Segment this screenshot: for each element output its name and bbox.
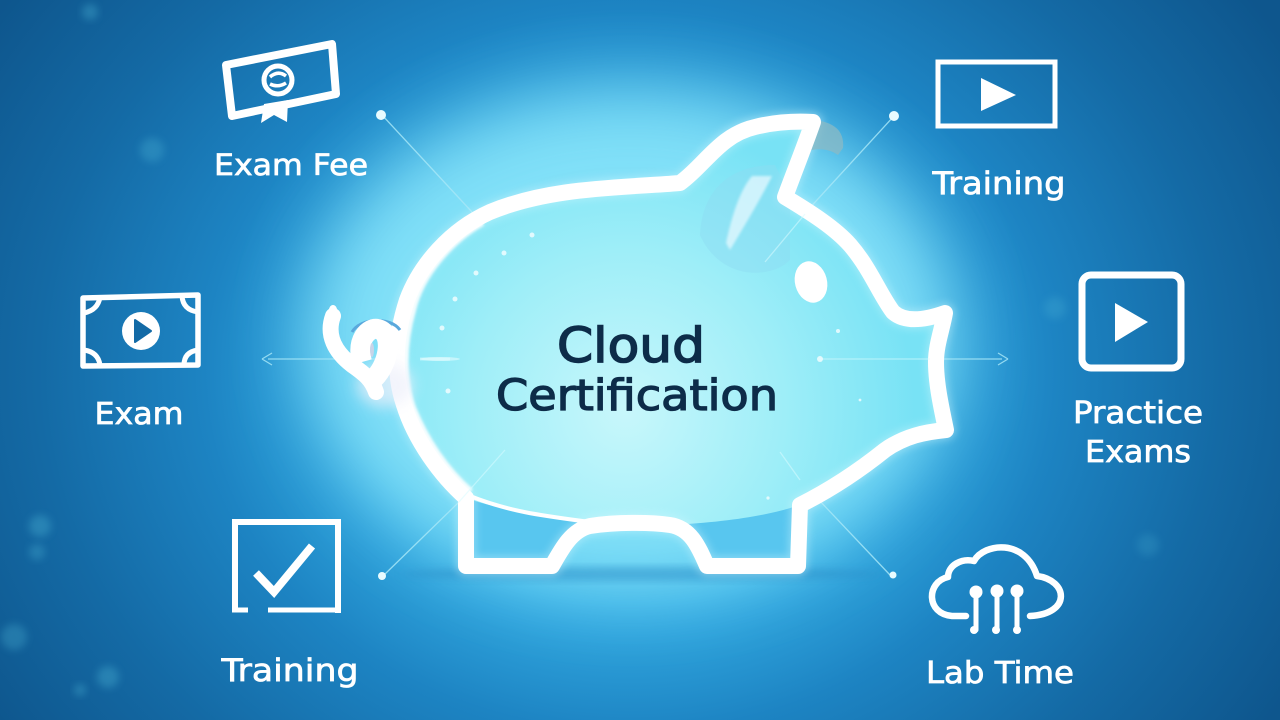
item: Lab Time [926, 547, 1074, 691]
label: Training [931, 166, 1066, 202]
item: Practice Exams [1073, 275, 1203, 470]
legs and arch fill [466, 498, 800, 566]
icon: certificate banknote [226, 44, 336, 123]
inner connector traces [420, 214, 930, 503]
piggy bank illustration [328, 120, 946, 581]
left inner rim [404, 222, 482, 492]
icon: checkbox [232, 522, 338, 613]
outline glow [397, 122, 946, 566]
icon: video frame [938, 62, 1055, 126]
tail [328, 305, 413, 407]
pig outline [397, 122, 946, 566]
belly line [470, 496, 590, 522]
icon: rounded play square [1082, 275, 1181, 368]
ear highlight [726, 176, 772, 250]
item: Exam [83, 295, 198, 432]
sparkle dots [420, 232, 861, 500]
label: Training [220, 653, 358, 689]
label: Exam Fee [214, 148, 368, 182]
soft glow halo [305, 90, 955, 590]
label: Exam [94, 397, 184, 432]
connector end nodes [376, 110, 899, 580]
item: Practice Exams: Exams [1085, 435, 1191, 470]
label: Lab Time [926, 656, 1074, 691]
label: Practice [1073, 396, 1203, 431]
connector lines [262, 115, 1008, 575]
item: Training bottom left [220, 522, 358, 689]
pig body fill [397, 122, 946, 525]
ground shadow [400, 567, 880, 581]
icon: cloud circuit [932, 547, 1061, 634]
center title: Certification [496, 371, 778, 421]
ear tip [806, 120, 843, 155]
center title [496, 318, 778, 421]
eye [790, 258, 832, 306]
item: Training top right [931, 62, 1066, 202]
item: Exam Fee [214, 44, 368, 182]
icon: ticket with play [83, 295, 198, 366]
center title: Cloud [557, 318, 705, 374]
inner ear [700, 165, 790, 273]
